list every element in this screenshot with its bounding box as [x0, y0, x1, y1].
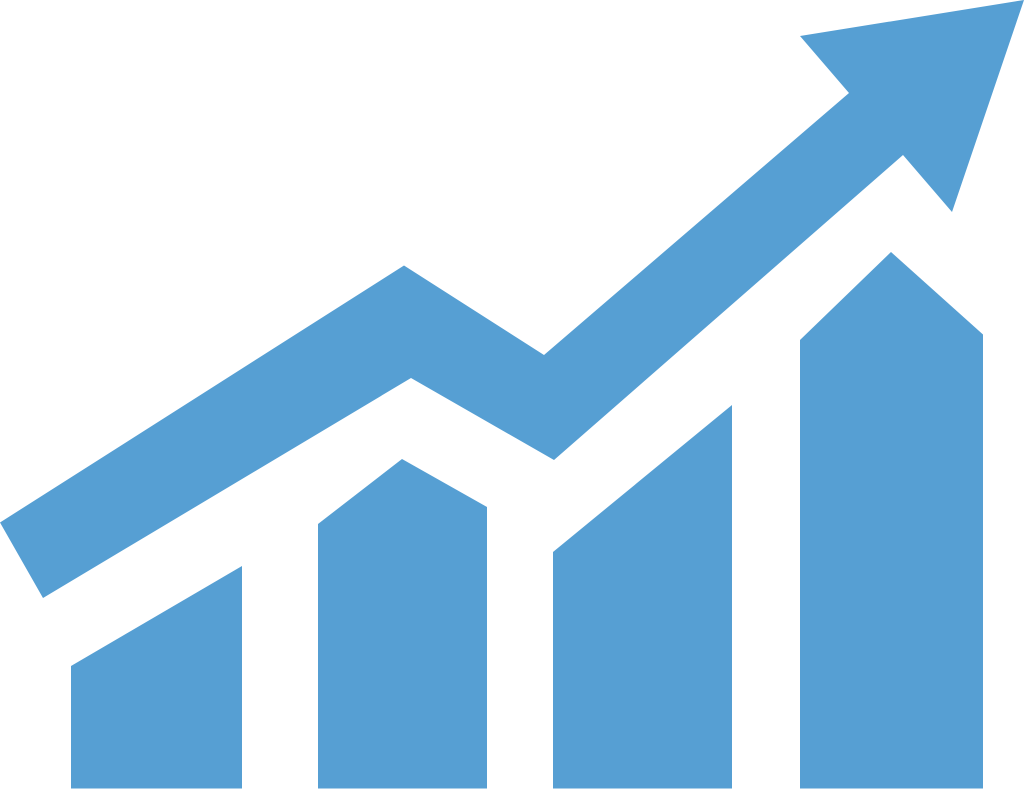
bar 3 — [553, 405, 732, 788]
bar 4 — [800, 252, 983, 788]
icon: rising arrow — [0, 0, 1024, 598]
bar 1 — [71, 566, 242, 788]
bar 2 — [318, 459, 487, 788]
